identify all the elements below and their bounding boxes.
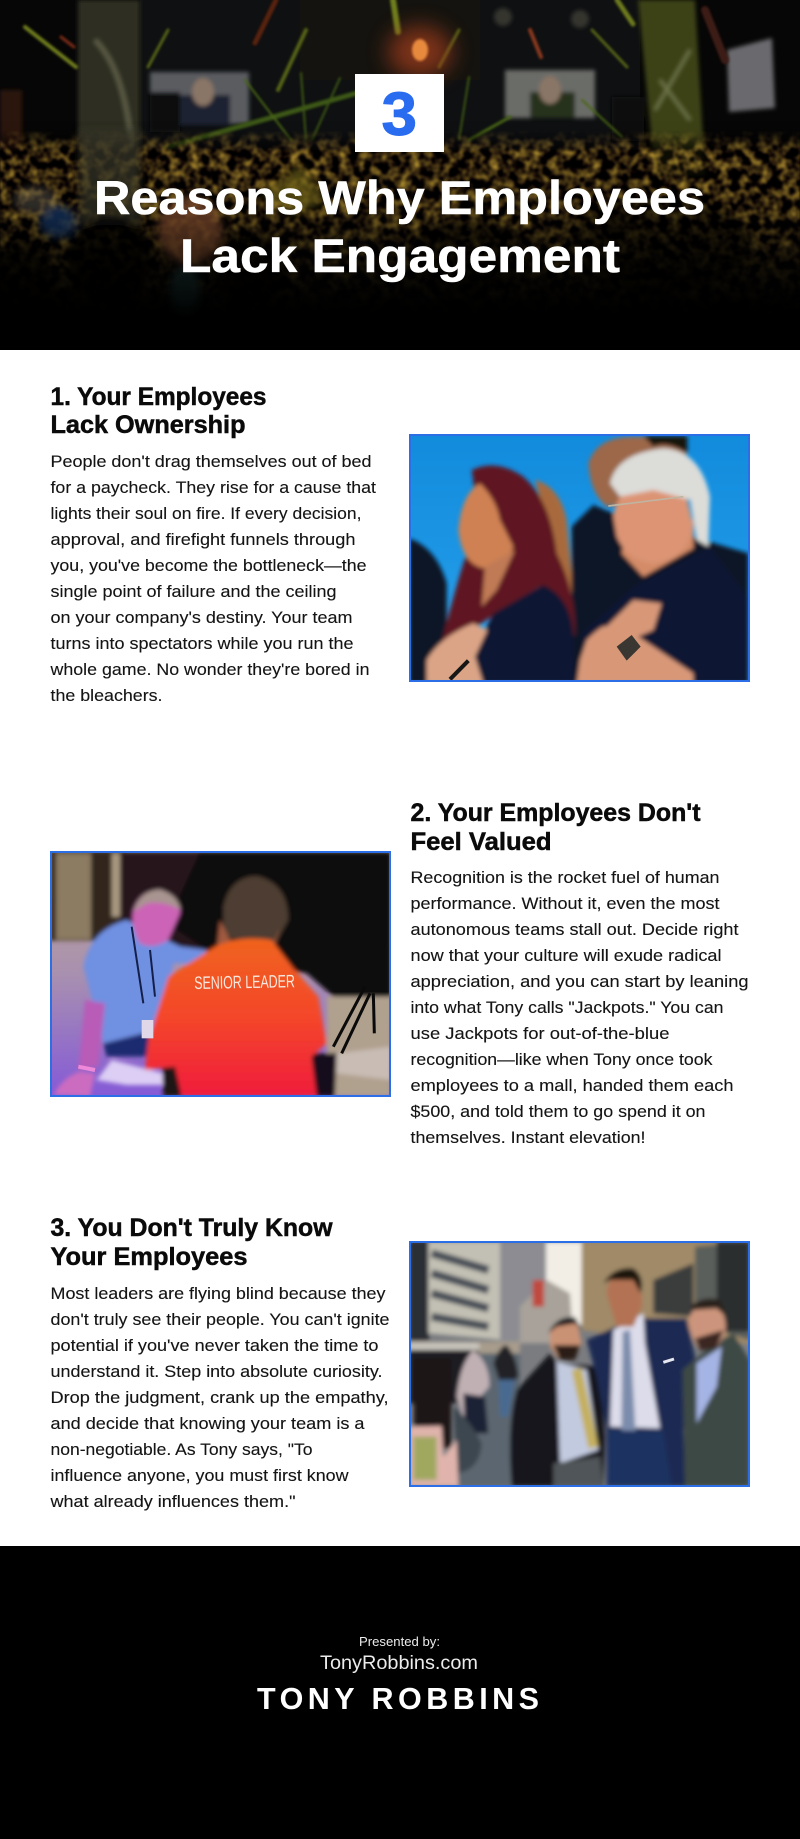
panel: reason 1 xyxy=(49,383,751,705)
body text: reason 3: don't truly see their people. You can't ignite xyxy=(50,1311,390,1329)
body text: reason 1: for a paycheck. They rise for a cause that xyxy=(50,479,376,497)
body text: reason 3: understand it. Step into absolute curiosity. xyxy=(50,1363,382,1381)
heading: reason 2: 2. Your Employees Don't xyxy=(410,799,701,827)
body text: reason 2: performance. Without it, even the most xyxy=(410,895,720,913)
body text: reason 3: what already influences them." xyxy=(49,1493,296,1511)
footer text: presented by: Presented by: xyxy=(359,1634,440,1649)
panel: hero header xyxy=(0,0,800,350)
body text: reason 2: $500, and told them to go spend it on xyxy=(410,1103,706,1121)
body text: reason 1: whole game. No wonder they're bored in xyxy=(49,661,369,679)
panel: reason 3 xyxy=(49,1214,751,1511)
body text: reason 2: recognition—like when Tony once took xyxy=(410,1051,713,1069)
heading: reason 2: Feel Valued xyxy=(410,828,552,856)
body text: reason 2: appreciation, and you can start by leaning xyxy=(410,973,748,991)
photo: two team members with hands on hearts xyxy=(409,434,751,683)
main title xyxy=(94,171,705,282)
photo frame xyxy=(410,435,749,681)
main title: Lack Engagement xyxy=(180,229,620,282)
heading: reason 3: 3. You Don't Truly Know xyxy=(50,1214,333,1242)
body text: reason 3: non-negotiable. As Tony says, "To xyxy=(50,1441,312,1459)
body text: reason 1: turns into spectators while you run the xyxy=(50,635,354,653)
number badge xyxy=(355,74,444,152)
footer text: website: TonyRobbins.com xyxy=(320,1653,478,1674)
body text: reason 2: use Jackpots for out-of-the-blue xyxy=(410,1025,670,1043)
heading: reason 1: Lack Ownership xyxy=(50,411,246,439)
crowd figures xyxy=(2,129,748,301)
main title: Reasons Why Employees xyxy=(94,171,705,224)
body text: reason 1 xyxy=(49,453,376,705)
photo: senior leader talking to attendee xyxy=(50,851,391,1099)
body text: reason 1: on your company's destiny. Your team xyxy=(50,609,352,627)
body text: reason 3: Most leaders are flying blind because they xyxy=(50,1285,386,1303)
panel: reason 2 xyxy=(50,799,749,1147)
footer logo: Tony Robbins wordmark: TONY ROBBINS xyxy=(257,1682,539,1716)
body text: reason 3: influence anyone, you must first know xyxy=(50,1467,349,1485)
body text: reason 2: themselves. Instant elevation! xyxy=(410,1129,646,1147)
photo: Tony Robbins with two men on a city street xyxy=(409,1241,751,1489)
body text: reason 3 xyxy=(49,1285,390,1511)
body text: reason 3: and decide that knowing your team is a xyxy=(50,1415,365,1433)
heading: reason 2 xyxy=(410,799,701,856)
photo frame xyxy=(410,1242,749,1486)
body text: reason 3: potential if you've never taken the time to xyxy=(50,1337,378,1355)
number badge: 3 xyxy=(382,80,417,148)
heading: reason 3: Your Employees xyxy=(50,1243,248,1271)
body text: reason 1: you, you've become the bottleneck—the xyxy=(50,557,366,575)
heading: reason 1 xyxy=(50,383,266,439)
body text: reason 2: Recognition is the rocket fuel of human xyxy=(410,869,720,887)
body text: reason 2: autonomous teams stall out. Decide right xyxy=(410,921,739,939)
body text: reason 1: single point of failure and the ceiling xyxy=(50,583,336,601)
heading: reason 3 xyxy=(50,1214,333,1271)
heading: reason 1: 1. Your Employees xyxy=(50,383,266,411)
body text: reason 1: the bleachers. xyxy=(50,687,162,705)
body text: reason 2: now that your culture will exude radical xyxy=(410,947,722,965)
photo: senior leader talking to attendee: SENIOR LEADER xyxy=(194,971,295,993)
hero background: concert crowd photo xyxy=(0,0,800,350)
body text: reason 2: employees to a mall, handed them each xyxy=(410,1077,734,1095)
body text: reason 2: into what Tony calls "Jackpots." You can xyxy=(410,999,724,1017)
body text: reason 1: approval, and firefight funnels through xyxy=(50,531,356,549)
body text: reason 3: Drop the judgment, crank up the empathy, xyxy=(50,1389,389,1407)
body text: reason 2 xyxy=(410,869,748,1147)
body text: reason 1: lights their soul on fire. If every decision, xyxy=(50,505,362,523)
body text: reason 1: People don't drag themselves out of bed xyxy=(50,453,372,471)
panel: footer xyxy=(0,1546,800,1839)
photo frame xyxy=(51,852,390,1096)
